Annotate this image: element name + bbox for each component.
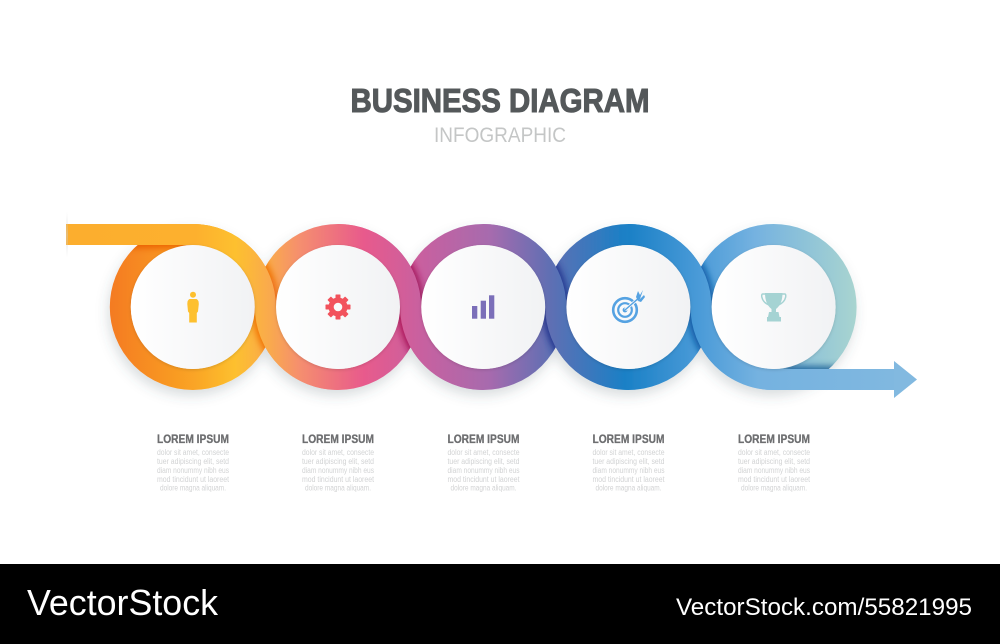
text block: step 4: LOREM IPSUM [592,432,664,446]
ribbon segment: ring 2 to ring 3 [338,234,483,380]
text block: step 3: dolor sit amet, consecte [448,448,520,457]
text block: step 1: mod tincidunt ut laoreet [157,475,230,484]
base rings [120,234,846,380]
text block: step 2: LOREM IPSUM [302,432,374,446]
text block: step 5: LOREM IPSUM [738,432,810,446]
white disc 1 [131,245,255,369]
panel: step 4 [566,245,690,369]
title: BUSINESS DIAGRAM [350,82,650,119]
text block: step 3 [448,432,520,492]
text block: step 3: LOREM IPSUM [448,432,520,446]
white disc 5 [712,245,836,369]
text block: step 4: diam nonummy nibh eus [592,466,664,475]
white disc 4 [566,245,690,369]
footer bar [0,564,1000,644]
text block: step 1 [157,432,230,492]
white disc 2 [276,245,400,369]
ribbon segment: ring 3 to ring 4 [483,234,628,380]
text block: step 2: dolor sit amet, consecte [302,448,374,457]
text block: step 2: diam nonummy nibh eus [302,466,374,475]
ribbon crossing shadows [131,245,836,369]
text block: step 1: tuer adipiscing elit, setd [157,457,229,466]
text block: step 1: diam nonummy nibh eus [157,466,229,475]
panel: step 1 [131,245,255,369]
text block: step 3: dolore magna aliquam. [450,484,516,492]
text block: step 1: dolor sit amet, consecte [157,448,229,457]
text block: step 5: dolore magna aliquam. [741,484,807,492]
text block: step 1: LOREM IPSUM [157,432,229,446]
text block: step 5: mod tincidunt ut laoreet [738,475,811,484]
panel: step 3 [421,245,545,369]
arrow head [894,361,917,398]
ribbon segment: ring 4 to arrow [628,234,895,380]
text block: step 4: tuer adipiscing elit, setd [592,457,664,466]
text block: step 5: tuer adipiscing elit, setd [738,457,810,466]
text block: step 2: mod tincidunt ut laoreet [302,475,375,484]
bar start edge [66,212,68,258]
text block: step 2: dolore magna aliquam. [305,484,371,492]
text block: step 4: dolore magna aliquam. [596,484,662,492]
panel: step 2 [276,245,400,369]
white disc 3 [421,245,545,369]
text block: step 5: dolor sit amet, consecte [738,448,810,457]
icon: trophy [762,293,786,322]
footer url: VectorStock.com/55821995 [676,594,972,621]
text block: step 1: dolore magna aliquam. [160,484,226,492]
text block: step 4 [592,432,665,492]
icon: bar chart [472,295,494,319]
footer logo: VectorStock [27,582,219,623]
icon: target with dart [613,290,645,322]
subtitle: INFOGRAPHIC [434,123,566,147]
ribbon segment: start bar to ring 2 [66,234,338,380]
text block: step 4: mod tincidunt ut laoreet [592,475,665,484]
text block: step 2: tuer adipiscing elit, setd [302,457,374,466]
diagram: interlocking ring ribbon [66,212,917,398]
text block: step 3: diam nonummy nibh eus [448,466,520,475]
text block: step 3: tuer adipiscing elit, setd [448,457,520,466]
panel: step 5 [712,245,836,369]
text block: step 5: diam nonummy nibh eus [738,466,810,475]
icon: gear [326,294,350,320]
text block: step 4: dolor sit amet, consecte [592,448,665,457]
text block: step 3: mod tincidunt ut laoreet [448,475,520,484]
icon: person [187,292,199,322]
text block: step 2 [302,432,375,492]
text block: step 5 [738,432,811,492]
